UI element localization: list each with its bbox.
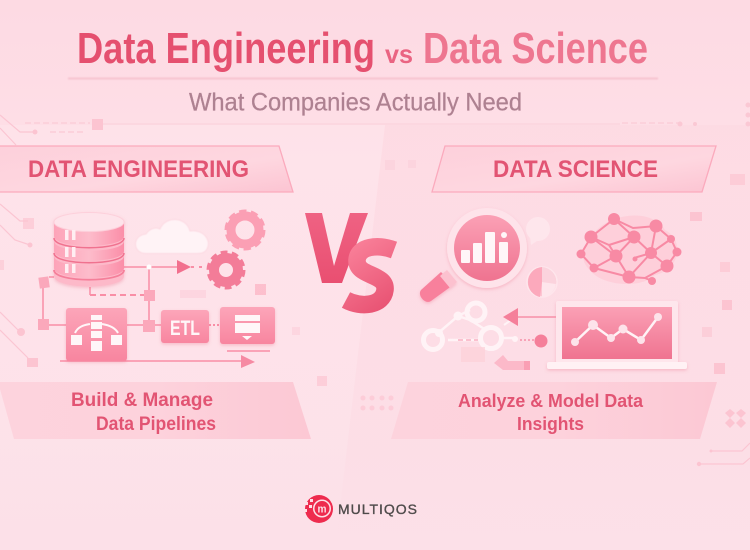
data science illustration xyxy=(420,208,687,370)
icon: ETL box xyxy=(161,310,209,343)
icon: magnifier xyxy=(420,208,527,302)
icon: left arrow xyxy=(503,308,556,326)
icon: bottom arrow xyxy=(241,355,255,368)
logo mark: m xyxy=(318,504,327,516)
icon: laptop xyxy=(547,301,687,369)
title: Data Engineering xyxy=(77,25,375,73)
logo text: MULTIQOS xyxy=(338,501,417,517)
banner: data science xyxy=(432,146,716,192)
title: Data Science xyxy=(423,25,648,73)
icon: node graph xyxy=(424,303,548,350)
caption: data engineering: Data Pipelines xyxy=(96,414,216,435)
banner: data engineering xyxy=(0,146,293,192)
caption: data science: Analyze & Model Data xyxy=(458,390,644,411)
icon: flow box xyxy=(66,308,127,361)
icon: ETL box: ETL xyxy=(170,317,200,340)
data engineering illustration xyxy=(38,212,275,368)
icon: pie chart xyxy=(527,267,557,297)
connector lines xyxy=(43,267,270,361)
icon: database xyxy=(54,212,124,286)
icon: gear small xyxy=(209,253,243,287)
icon: gear large xyxy=(227,212,263,248)
icon: speech bubble xyxy=(526,217,550,245)
icon: cloud xyxy=(136,219,208,254)
title: vs xyxy=(385,39,413,69)
icon: brain network xyxy=(576,213,682,285)
letter V xyxy=(305,213,368,283)
logo: multiqos xyxy=(305,495,417,523)
caption: data engineering xyxy=(0,382,311,439)
letter S xyxy=(346,247,394,305)
title rule xyxy=(68,78,658,80)
junction nodes xyxy=(38,276,266,332)
caption: data engineering: Build & Manage xyxy=(71,390,213,411)
icon: stack box xyxy=(220,307,275,344)
icon: arrow head xyxy=(177,260,191,274)
vs emblem xyxy=(305,213,394,305)
subtitle: What Companies Actually Need xyxy=(189,88,522,116)
icon: small block arrow xyxy=(461,347,530,370)
caption: data science: Insights xyxy=(517,413,584,434)
caption: data science xyxy=(391,382,717,439)
banner: data engineering: DATA ENGINEERING xyxy=(28,156,249,183)
banner: data science: DATA SCIENCE xyxy=(493,156,658,183)
title xyxy=(77,25,648,73)
